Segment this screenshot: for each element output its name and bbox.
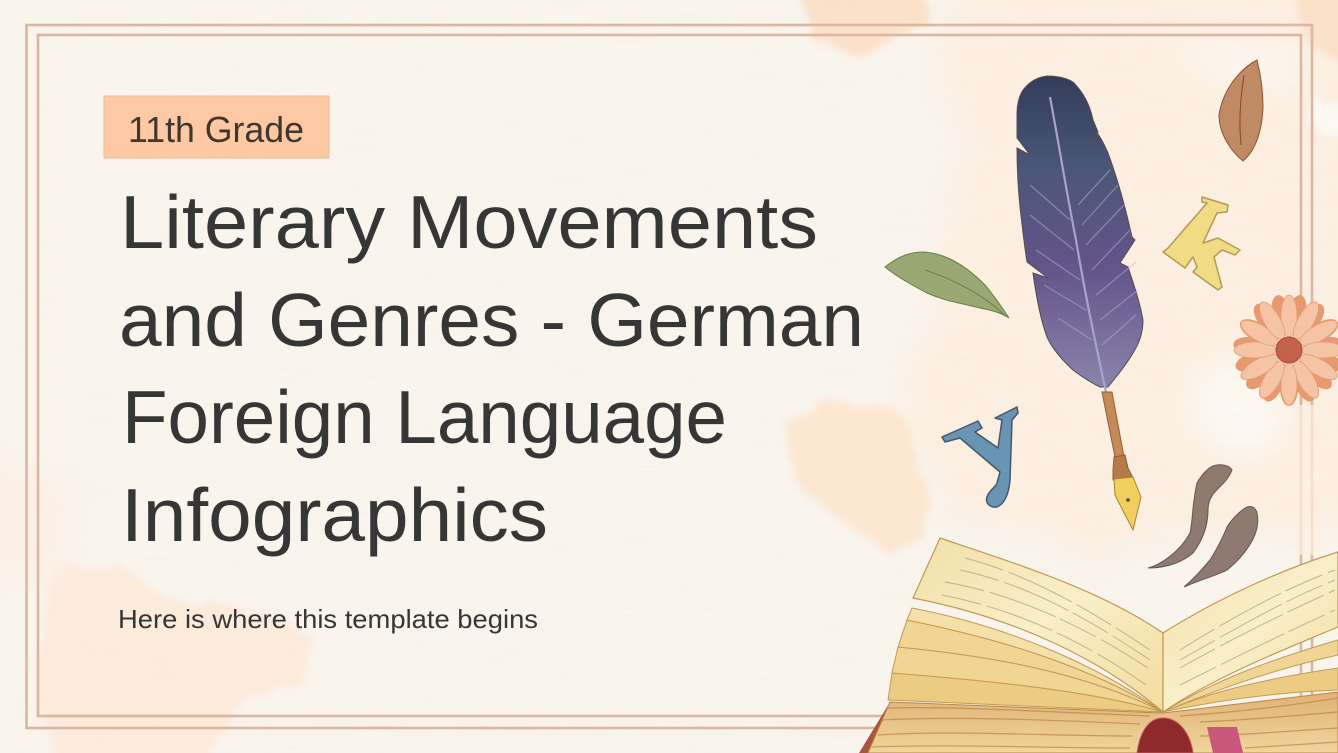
icon: letter k — [1163, 197, 1240, 290]
title: Literary Movements — [120, 180, 818, 264]
right page — [1163, 552, 1338, 712]
icon: fountain pen nib — [1102, 392, 1141, 530]
title: Infographics — [121, 473, 548, 557]
page block — [868, 692, 1338, 753]
page text lines — [942, 558, 1335, 685]
spine hole — [1137, 718, 1193, 753]
icon: brown leaf — [1219, 60, 1263, 161]
left fanned pages — [888, 608, 1163, 712]
subtitle: Here is where this template begins — [118, 604, 538, 634]
title: Foreign Language — [122, 375, 727, 459]
icon: flower — [1232, 293, 1338, 406]
grade badge: 11th Grade — [128, 109, 304, 150]
title — [119, 180, 864, 557]
left page — [913, 538, 1163, 712]
block lines — [872, 698, 1338, 748]
grade badge — [104, 96, 329, 158]
right fanned pages — [1163, 640, 1338, 712]
illustration: open book — [859, 538, 1338, 753]
icon: letter y — [942, 407, 1018, 507]
icon: brush strokes — [1148, 465, 1258, 587]
book cover edge — [859, 702, 893, 753]
bookmark ribbon — [1207, 727, 1243, 753]
title: and Genres - German — [119, 278, 864, 362]
icon: green leaf — [885, 252, 1009, 318]
icon: feather — [1017, 76, 1143, 392]
wash fading the frame at lower right — [1294, 405, 1320, 555]
